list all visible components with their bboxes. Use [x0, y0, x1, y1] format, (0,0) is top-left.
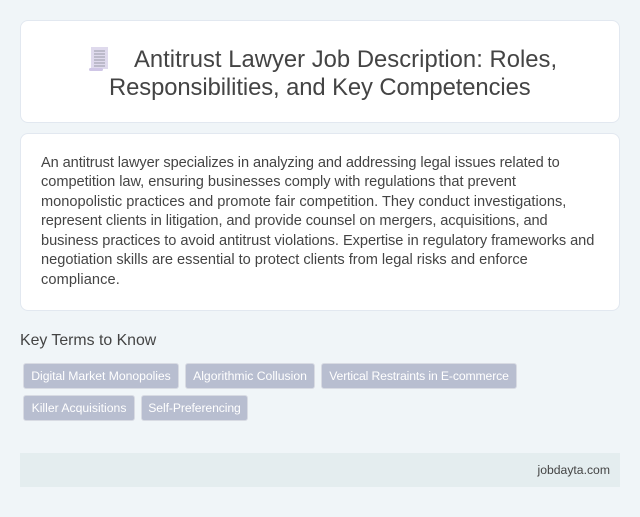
heading: key terms: Key Terms to Know	[20, 332, 156, 349]
tag: killer acquisitions	[23, 395, 135, 421]
tag: self-preferencing	[141, 395, 248, 421]
tag: vertical restraints: Vertical Restraints in E-commerce	[329, 369, 509, 383]
description text: represent clients in litigation, and provide counsel on mergers, acquisitions, and	[41, 213, 548, 229]
tag: algorithmic collusion	[185, 363, 315, 389]
footer source: jobdayta.com	[538, 463, 610, 477]
description text: business practices to avoid antitrust violations. Expertise in regulatory frameworks and	[41, 233, 594, 249]
description text: negotiation skills are essential to protect clients from legal risks and enforce	[41, 252, 528, 268]
description text: compliance.	[41, 272, 120, 288]
title: Antitrust Lawyer Job Description: Roles,	[134, 46, 557, 73]
tag: algorithmic collusion: Algorithmic Collusion	[193, 369, 307, 383]
description card	[20, 133, 620, 311]
title	[109, 46, 557, 101]
tag: digital market monopolies: Digital Market Monopolies	[31, 369, 171, 383]
footer bar	[20, 453, 620, 487]
tag: self-preferencing: Self-Preferencing	[148, 401, 241, 415]
title card	[20, 20, 620, 123]
tag: vertical restraints	[321, 363, 517, 389]
description text: competition law, ensuring businesses comply with regulations that prevent	[41, 174, 516, 190]
description text	[41, 155, 594, 288]
description text: monopolistic practices and promote fair competition. They conduct investigations,	[41, 194, 566, 210]
tag: killer acquisitions: Killer Acquisitions	[32, 401, 126, 415]
title: Responsibilities, and Key Competencies	[109, 74, 531, 101]
tag: digital market monopolies	[23, 363, 179, 389]
icon: document scroll	[89, 47, 108, 71]
description text: An antitrust lawyer specializes in analyzing and addressing legal issues related to	[41, 155, 560, 171]
key term tags	[23, 363, 517, 421]
